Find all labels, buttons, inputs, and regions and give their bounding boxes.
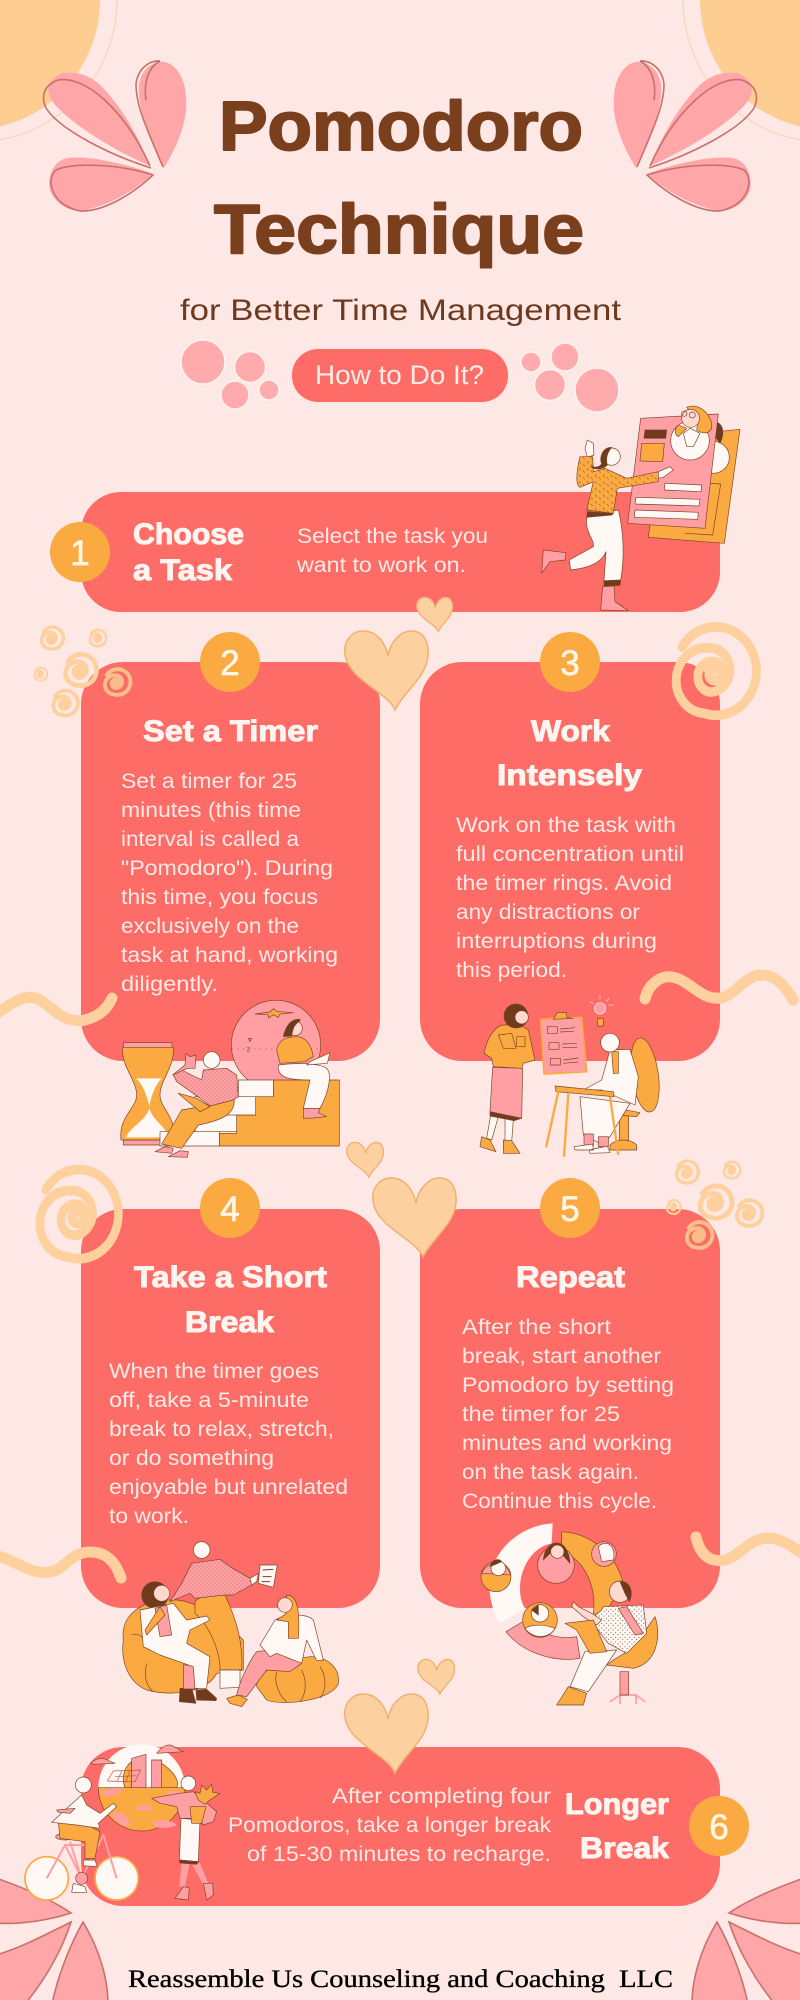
heading: Repeat (516, 1261, 625, 1294)
heading: Take a Short (134, 1261, 327, 1294)
sun: top left (0, 0, 117, 142)
panel: step 3 work intensely (420, 632, 720, 1157)
panel: step 4 take a short break (81, 1178, 380, 1707)
body text (121, 770, 338, 996)
body text: Set a timer for 25 (121, 770, 297, 793)
body text (462, 1316, 674, 1513)
petals: top left (43, 61, 186, 211)
title: Technique (214, 190, 584, 268)
body text: any distractions or (456, 901, 640, 924)
petals: bottom left (0, 1878, 108, 2000)
body text: Continue this cycle. (462, 1490, 657, 1513)
body text: diligently. (121, 973, 218, 996)
illustration: globe, cyclist and woman with plant (25, 1744, 220, 1900)
body text: on the task again. (462, 1461, 639, 1484)
spiral cluster: upper left (34, 627, 130, 715)
badge 6 (689, 1796, 749, 1856)
heading: Break (185, 1306, 274, 1339)
body text: of 15-30 minutes to recharge. (247, 1843, 551, 1866)
sun: top right (683, 0, 800, 142)
body text: After completing four (332, 1785, 551, 1808)
heading: Break (580, 1832, 669, 1865)
heading (497, 715, 642, 792)
bubbles: left (181, 340, 279, 409)
title (214, 87, 584, 268)
body text (109, 1360, 348, 1528)
body text: the timer rings. Avoid (456, 872, 672, 895)
subtitle: for Better Time Management (180, 294, 622, 327)
subheading pill (292, 349, 508, 402)
body text: exclusively on the (121, 915, 299, 938)
squiggle: right upper (645, 975, 793, 1000)
badge 2 (200, 632, 260, 692)
petals: top right (614, 61, 757, 211)
heading: Work (531, 715, 610, 748)
heading: Set a Timer (143, 715, 318, 748)
illustration: two people with clipboard and desk (480, 995, 663, 1157)
body text: After the short (462, 1316, 611, 1339)
body text: Pomodoros, take a longer break (228, 1814, 552, 1837)
badge 4: 4 (220, 1190, 240, 1229)
panel: step 6 longer break (25, 1744, 749, 1906)
squiggle: right lower (696, 1537, 800, 1561)
petals: bottom right (692, 1878, 800, 2000)
body text: to work. (109, 1505, 189, 1528)
illustration: hourglass, tomato timer and two people on stairs (121, 1000, 339, 1157)
body text: Select the task you (297, 525, 488, 548)
heart: large middle (373, 1178, 456, 1257)
body text: Pomodoro by setting (462, 1374, 674, 1397)
badge 1: 1 (70, 534, 90, 573)
illustration: woman with profile documents (542, 406, 740, 611)
body text: interval is called a (121, 828, 299, 851)
body text: off, take a 5-minute (109, 1389, 309, 1412)
heading: a Task (133, 554, 232, 587)
badge 6: 6 (709, 1808, 729, 1847)
body text: want to work on. (296, 554, 466, 577)
subheading pill: How to Do It? (315, 360, 484, 390)
heading: Longer (565, 1788, 669, 1821)
badge 2: 2 (220, 644, 240, 683)
body text: enjoyable but unrelated (109, 1476, 348, 1499)
body text: this period. (456, 959, 567, 982)
heart: large bottom (345, 1694, 428, 1773)
body text: this time, you focus (121, 886, 318, 909)
body text (228, 1785, 552, 1866)
body text: minutes and working (462, 1432, 672, 1455)
heart: large top (345, 631, 428, 710)
heading (134, 1261, 327, 1339)
illustration: three people on bean bags (123, 1542, 339, 1707)
body text: break to relax, stretch, (109, 1418, 334, 1441)
heading (133, 518, 244, 587)
illustration: cycle of people with man in chair (481, 1523, 658, 1705)
badge 3: 3 (560, 644, 580, 683)
heart: small top (417, 597, 453, 631)
bubbles: right (521, 343, 619, 412)
heart: small bottom (418, 1659, 454, 1694)
body text: full concentration until (456, 843, 684, 866)
body text (456, 814, 684, 982)
squiggle: left lower (0, 1552, 121, 1578)
heart: small middle (347, 1142, 383, 1177)
body text: the timer for 25 (462, 1403, 620, 1426)
heading (565, 1788, 669, 1865)
body text: interruptions during (456, 930, 657, 953)
badge 4 (200, 1178, 260, 1238)
panel: step 2 set a timer (81, 632, 380, 1157)
body text (296, 525, 488, 577)
badge 1 (50, 522, 110, 582)
illustration: hourglass, tomato timer and two people on stairs: 2 (247, 1047, 251, 1054)
panel: step 1 choose a task (50, 406, 740, 612)
spiral cluster: middle right (667, 1161, 762, 1248)
body text: task at hand, working (121, 944, 338, 967)
spiral: large middle left (40, 1169, 118, 1259)
heading: Intensely (497, 759, 642, 792)
body text: break, start another (462, 1345, 661, 1368)
badge 3 (540, 632, 600, 692)
body text: When the timer goes (109, 1360, 319, 1383)
body text: minutes (this time (121, 799, 301, 822)
title: Pomodoro (219, 87, 583, 165)
heading: Choose (133, 518, 244, 551)
squiggle: left upper (0, 997, 112, 1021)
body text: Work on the task with (456, 814, 676, 837)
footer credit: Reassemble Us Counseling and Coaching LLC (128, 1966, 673, 1993)
badge 5: 5 (560, 1190, 580, 1229)
badge 5 (540, 1178, 600, 1238)
spiral: large upper right (676, 627, 756, 715)
body text: "Pomodoro"). During (121, 857, 333, 880)
panel: step 5 repeat (420, 1178, 720, 1705)
body text: or do something (109, 1447, 274, 1470)
